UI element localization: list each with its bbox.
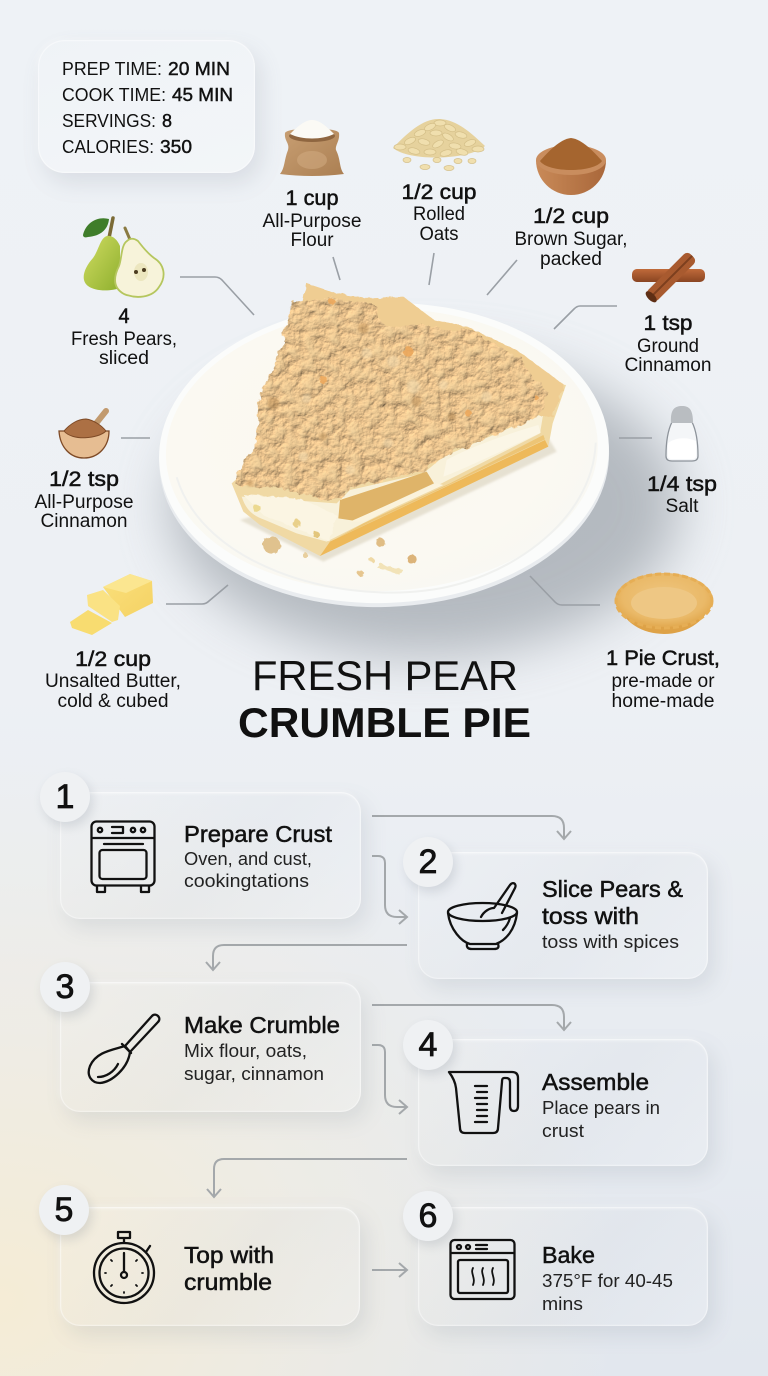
ingredient: butter: 1/2 cup: [75, 648, 151, 671]
icon: stopwatch: [94, 1232, 154, 1303]
icon: small spice bowl: [59, 411, 109, 458]
ingredient: salt: [647, 406, 717, 517]
panel: step 6 bake: 375°F for 40-45: [542, 1271, 673, 1291]
icon: rolled oats: [393, 119, 485, 170]
panel: step 1 prepare crust: [60, 792, 361, 919]
panel: step 6 bake: [418, 1207, 708, 1326]
panel: recipe stats: 8: [162, 110, 172, 131]
ingredient: all-purpose cinnamon: [34, 411, 134, 532]
ingredient: pie crust: home-made: [612, 691, 714, 712]
panel: recipe stats: 20 MIN: [168, 58, 230, 79]
ingredient: all-purpose cinnamon: 1/2 tsp: [49, 468, 119, 491]
panel: step 2 slice pears: toss with: [542, 903, 639, 929]
ingredient: ground cinnamon: Ground: [637, 336, 699, 357]
badge: 5: [39, 1185, 89, 1235]
ingredient: ground cinnamon: 1 tsp: [644, 312, 692, 335]
icon: bowl of brown sugar: [536, 138, 606, 195]
panel: step 6 bake: Bake: [542, 1242, 595, 1268]
golden pear layer: [338, 472, 434, 521]
panel: step 4 assemble: Assemble: [542, 1069, 649, 1095]
panel: step 1 prepare crust: Oven, and cust,: [184, 849, 312, 869]
icon: mixing bowl with spoon: [448, 883, 517, 949]
panel: step 5 top with crumble: crumble: [184, 1269, 272, 1295]
ingredient: pears: Fresh Pears,: [71, 329, 177, 350]
panel: step 2 slice pears: toss with spices: [542, 932, 679, 952]
badge: 1: 1: [56, 778, 74, 816]
ingredient: brown sugar: Brown Sugar,: [514, 229, 628, 250]
ingredient: pears: 4: [118, 305, 130, 328]
icon: flour sack: [280, 120, 344, 176]
ingredient: brown sugar: 1/2 cup: [533, 205, 609, 228]
badge: 6: [403, 1191, 453, 1241]
ingredient: oats: 1/2 cup: [402, 181, 476, 204]
panel: recipe stats: COOK TIME:: [62, 84, 166, 105]
panel: recipe stats: CALORIES:: [62, 136, 154, 157]
panel: recipe stats: 350: [160, 136, 192, 157]
ingredient: flour: [262, 120, 362, 251]
icon: measuring jug: [449, 1072, 518, 1133]
ingredient: butter: Unsalted Butter,: [45, 671, 181, 692]
ingredient: salt: Salt: [666, 496, 699, 517]
ingredient: flour: All-Purpose: [262, 211, 362, 232]
panel: recipe stats: 45 MIN: [172, 84, 233, 105]
title: [238, 652, 531, 746]
white filling right: [443, 425, 541, 477]
flow arrows: [206, 816, 571, 1277]
ingredient: butter: cold & cubed: [58, 691, 168, 712]
panel: step 5 top with crumble: Top with: [184, 1242, 274, 1268]
plate shadow: [170, 355, 680, 655]
badge: 4: [403, 1020, 453, 1070]
icon: salt shaker: [666, 406, 698, 461]
icon: pears: [83, 218, 164, 297]
panel: step 2 slice pears: Slice Pears &: [542, 876, 683, 902]
panel: step 1 prepare crust: cookingtations: [184, 871, 309, 891]
ingredient: ground cinnamon: [624, 251, 712, 376]
ingredient: brown sugar: [514, 138, 628, 270]
ingredient: salt: 1/4 tsp: [647, 473, 717, 496]
panel: step 4 assemble: Place pears in: [542, 1098, 660, 1118]
panel: recipe stats: PREP TIME:: [62, 58, 162, 79]
orange baked spots: [319, 298, 539, 417]
title: FRESH PEAR: [252, 652, 518, 699]
crumbs on plate: [263, 536, 417, 576]
crumble shaded gaps: [247, 323, 456, 487]
badge: 3: [40, 962, 90, 1012]
badge: 2: 2: [419, 843, 437, 881]
icon: spoon: [89, 1015, 159, 1083]
panel: recipe stats: SERVINGS:: [62, 110, 156, 131]
panel: step 4 assemble: [418, 1039, 708, 1166]
ingredient: oats: Rolled: [413, 204, 465, 225]
ingredient: pears: [71, 218, 177, 369]
panel: step 6 bake: mins: [542, 1294, 583, 1314]
ingredient: all-purpose cinnamon: All-Purpose: [34, 492, 134, 513]
ingredient: flour: Flour: [290, 230, 334, 251]
panel: step 4 assemble: crust: [542, 1121, 584, 1141]
crumble topping: [235, 298, 548, 501]
white bitten filling: [243, 495, 337, 542]
lower crust band: [320, 440, 548, 556]
badge: 1: [40, 772, 90, 822]
icon: oven: [92, 822, 154, 892]
plate and pie: [154, 283, 680, 655]
plate: [154, 295, 614, 615]
panel: recipe stats: [38, 40, 255, 173]
crumble lit clumps: [299, 348, 492, 475]
panel: step 2 slice pears: [418, 852, 708, 979]
ingredient: flour: 1 cup: [286, 187, 338, 210]
panel: step 5 top with crumble: [60, 1207, 360, 1326]
ingredient: pie crust: [606, 573, 720, 712]
icon: cinnamon sticks: [632, 251, 705, 304]
panel: step 1 prepare crust: Prepare Crust: [184, 821, 333, 847]
ingredient: oats: [393, 119, 485, 245]
panel: step 3 make crumble: sugar, cinnamon: [184, 1064, 324, 1084]
badge: 4: 4: [419, 1026, 437, 1064]
ingredient: pie crust: 1 Pie Crust,: [606, 647, 720, 670]
pie slice: [232, 283, 566, 576]
edge crust: [290, 283, 564, 417]
ingredient: brown sugar: packed: [540, 249, 602, 270]
badge: 6: 6: [419, 1197, 437, 1235]
side crust and filling: [232, 370, 566, 556]
badge: 2: [403, 837, 453, 887]
icon: butter block: [70, 574, 153, 635]
ingredient: pie crust: pre-made or: [612, 671, 715, 692]
leader lines: [121, 253, 652, 605]
panel: step 3 make crumble: [60, 982, 361, 1112]
icon: pie crust: [615, 573, 713, 634]
panel: step 3 make crumble: Mix flour, oats,: [184, 1041, 307, 1061]
ingredient: oats: Oats: [420, 224, 458, 245]
panel: step 3 make crumble: Make Crumble: [184, 1012, 340, 1038]
ingredient: butter: [45, 574, 181, 712]
icon: oven with heat: [450, 1240, 514, 1299]
badge: 3: 3: [56, 968, 74, 1006]
ingredient: pears: sliced: [99, 348, 149, 369]
shadow under the slice: [240, 430, 557, 562]
badge: 5: 5: [55, 1191, 73, 1229]
ingredient: ground cinnamon: Cinnamon: [624, 355, 712, 376]
title: CRUMBLE PIE: [238, 699, 531, 746]
ingredient: all-purpose cinnamon: Cinnamon: [40, 511, 128, 532]
